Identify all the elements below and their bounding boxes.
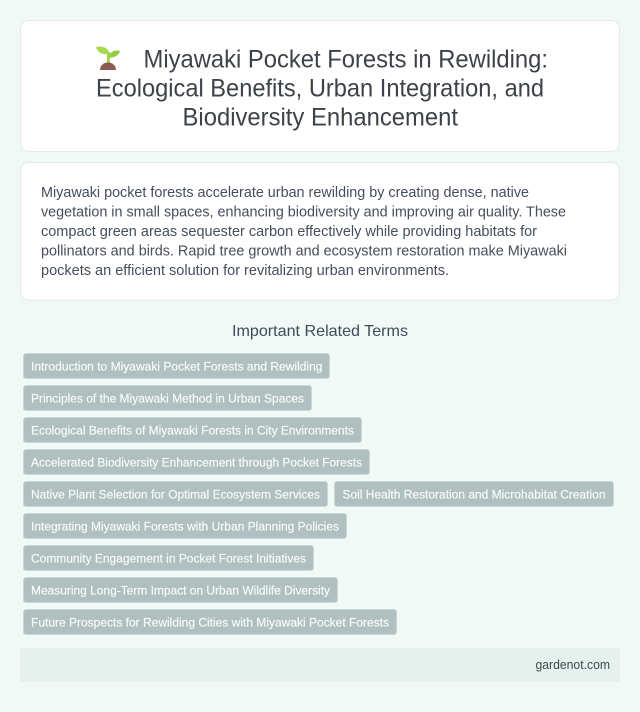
tag 7 xyxy=(24,514,346,538)
tag 10: Future Prospects for Rewilding Cities with Miyawaki Pocket Forests xyxy=(31,616,389,630)
tag 2: Principles of the Miyawaki Method in Urban Spaces xyxy=(31,392,304,406)
text block: description: pollinators and birds. Rapid tree growth and ecosystem restoration make Miyawaki xyxy=(41,244,567,260)
tag 10 xyxy=(24,610,396,634)
icon: seedling xyxy=(96,47,120,70)
tag 8: Community Engagement in Pocket Forest Initiatives xyxy=(31,552,306,566)
tag 7: Integrating Miyawaki Forests with Urban Planning Policies xyxy=(31,520,339,534)
text block: description: vegetation in small spaces, enhancing biodiversity and improving air quality. These xyxy=(41,204,566,220)
panel: title card xyxy=(20,20,620,152)
tag 4 xyxy=(24,450,370,474)
title: Ecological Benefits, Urban Integration, and xyxy=(96,76,544,102)
tag 5: Native Plant Selection for Optimal Ecosystem Services xyxy=(31,488,320,502)
tag 9 xyxy=(24,578,338,602)
footer xyxy=(20,648,620,682)
footer: gardenot.com xyxy=(536,657,610,672)
tag 3 xyxy=(24,418,362,442)
tag 9: Measuring Long-Term Impact on Urban Wildlife Diversity xyxy=(31,584,331,598)
tag 6: Soil Health Restoration and Microhabitat Creation xyxy=(342,488,606,502)
panel: description xyxy=(20,162,620,300)
tag 6 xyxy=(334,482,614,506)
title: Miyawaki Pocket Forests in Rewilding: xyxy=(144,46,548,74)
tag 1: Introduction to Miyawaki Pocket Forests and Rewilding xyxy=(31,360,323,374)
tag 2 xyxy=(24,386,312,410)
text block: description: Miyawaki pocket forests accelerate urban rewilding by creating dense, native xyxy=(41,185,529,201)
heading: related terms: Important Related Terms xyxy=(232,323,408,340)
tag 5 xyxy=(24,482,328,506)
tag list xyxy=(24,354,614,634)
text block: description: pockets an efficient solution for revitalizing urban environments. xyxy=(41,263,449,279)
title: Biodiversity Enhancement xyxy=(182,104,458,132)
tag 1 xyxy=(24,354,330,378)
tag 3: Ecological Benefits of Miyawaki Forests in City Environments xyxy=(31,424,354,438)
tag 4: Accelerated Biodiversity Enhancement through Pocket Forests xyxy=(31,456,362,470)
tag 8 xyxy=(24,546,314,570)
title xyxy=(96,46,548,132)
text block: description: compact green areas sequester carbon effectively while providing habitats for xyxy=(41,224,537,240)
text block: description xyxy=(41,185,567,279)
